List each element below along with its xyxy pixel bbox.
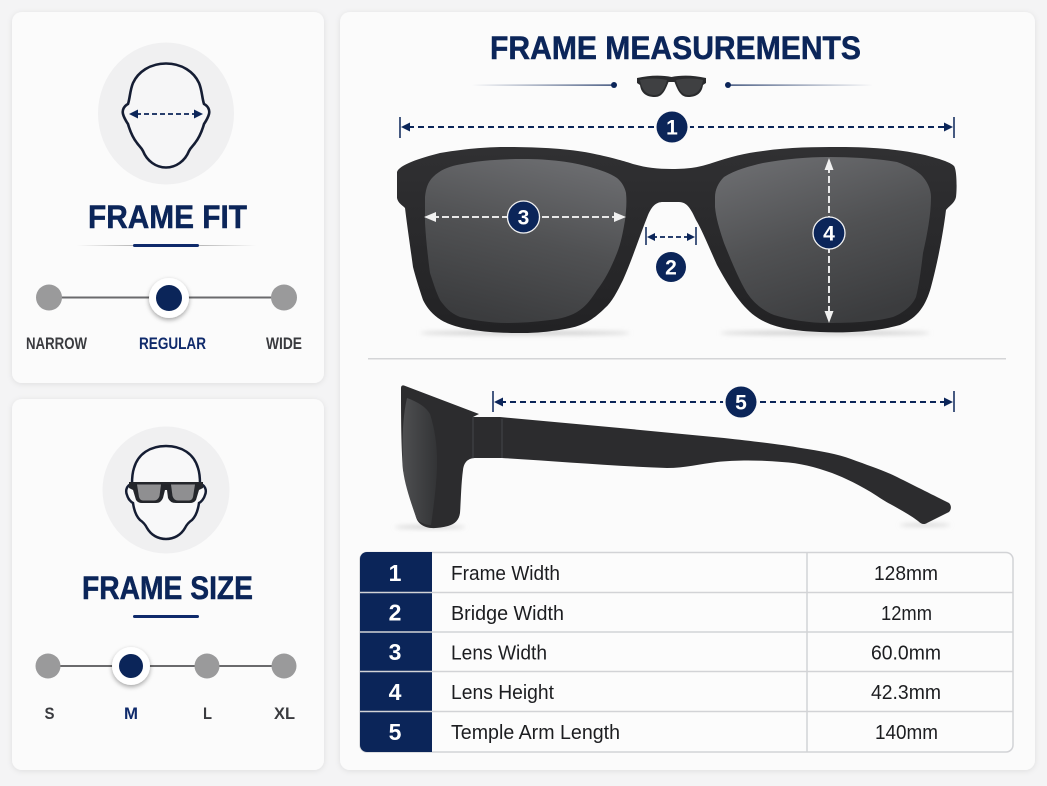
icon: head with sunglasses (102, 426, 230, 554)
slider: s m l xl (36, 647, 296, 685)
hinge seam (473, 417, 502, 458)
row 5: 140mm (875, 722, 938, 744)
right lens (715, 157, 931, 323)
icon: head with width arrow (98, 42, 234, 184)
heading: frame size: FRAME SIZE (82, 570, 253, 606)
heading ornament with mini sunglasses (472, 76, 873, 97)
row 1: 1 (389, 560, 402, 586)
side view sunglasses (395, 385, 951, 528)
dimension 4: lens height: 4 (823, 222, 835, 246)
row 3: 60.0mm (871, 642, 941, 664)
row 5 (389, 719, 938, 745)
row 3: 3 (389, 639, 401, 665)
label: wide: WIDE (266, 334, 302, 353)
slider: narrow regular wide (36, 278, 297, 318)
row 1: 128mm (874, 563, 938, 585)
dimension 3: lens width: 3 (518, 206, 529, 230)
label: regular: REGULAR (139, 334, 206, 353)
row 4: 4 (389, 679, 402, 705)
heading underline (133, 615, 199, 618)
label: narrow: NARROW (26, 334, 88, 353)
row 3 (389, 639, 941, 665)
dimension 1: frame width (400, 109, 954, 145)
panel: frame measurements (340, 12, 1035, 770)
label: m: M (124, 704, 138, 723)
dimension 5: temple arm length (493, 384, 954, 420)
panel: frame fit (12, 12, 324, 383)
dimension 5: temple arm length: 5 (735, 392, 747, 414)
row 4: 42.3mm (871, 682, 941, 704)
row 2: 12mm (881, 603, 932, 625)
front view sunglasses (397, 147, 957, 335)
row 5: Temple Arm Length (451, 722, 620, 744)
dimension 2: bridge width: 2 (665, 256, 677, 280)
row 3: Lens Width (451, 642, 547, 664)
dimension 4: lens height (813, 158, 845, 323)
heading underline (77, 244, 256, 247)
dimension 3: lens width (424, 201, 626, 233)
panel: frame size (12, 399, 324, 770)
label: l: L (203, 704, 212, 723)
dimension 1: frame width: 1 (666, 116, 678, 140)
divider (368, 358, 1006, 360)
label: xl: XL (274, 704, 295, 723)
row 4: Lens Height (451, 682, 554, 704)
heading: frame measurements: FRAME MEASUREMENTS (490, 30, 861, 66)
row 5: 5 (389, 719, 402, 745)
left lens (425, 159, 626, 323)
row 2: 2 (389, 600, 401, 626)
row 1: Frame Width (451, 563, 560, 585)
table: measurements (360, 552, 1013, 752)
temple arm and front (401, 385, 951, 528)
side lens (402, 398, 437, 525)
dimension 2: bridge width (646, 227, 696, 282)
frame body (397, 147, 957, 333)
row 2: Bridge Width (451, 603, 564, 625)
label: s: S (44, 704, 54, 723)
row 4 (389, 679, 941, 705)
row 1 (389, 560, 938, 586)
heading: frame fit: FRAME FIT (88, 199, 247, 235)
row 2 (389, 600, 932, 626)
